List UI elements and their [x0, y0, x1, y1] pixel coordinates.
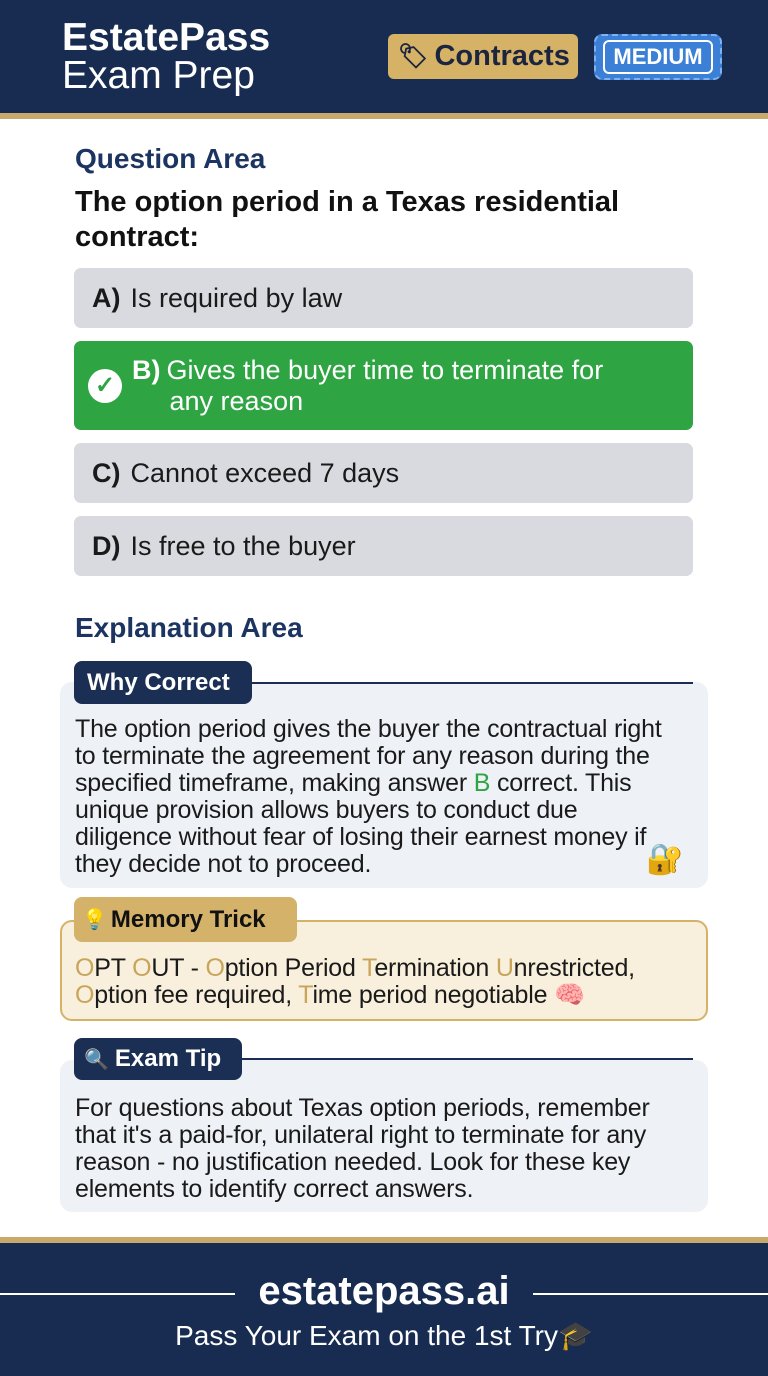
option B correct: any reason	[170, 386, 303, 416]
tab: memory trick: 💡	[82, 909, 107, 931]
exam tip text: reason - no justification needed. Look for these key	[75, 1148, 630, 1176]
footer	[0, 1237, 768, 1376]
heading: question area: Question Area	[75, 143, 265, 174]
why correct text	[75, 715, 662, 878]
option B correct: B)Gives the buyer time to terminate for	[132, 354, 603, 384]
brand title	[62, 16, 270, 97]
option C	[74, 443, 693, 503]
brand title: Exam Prep	[62, 54, 255, 97]
tab: why correct: Why Correct	[87, 668, 230, 696]
panel: memory trick	[60, 920, 708, 1021]
option A: Is required by law	[130, 282, 342, 312]
header	[0, 0, 768, 119]
exam tip text: that it's a paid-for, unilateral right to terminate for any	[75, 1121, 646, 1149]
category badge: 🏷	[398, 43, 428, 70]
why correct text: The option period gives the buyer the contractual right	[75, 715, 662, 743]
tab: exam tip: 🔍	[84, 1048, 109, 1070]
memory trick text	[75, 954, 635, 1009]
option A: A)	[92, 282, 120, 312]
tab: exam tip: Exam Tip	[115, 1045, 221, 1072]
brand title: EstatePass	[62, 16, 270, 59]
tab: memory trick	[74, 897, 297, 942]
memory trick text: Option fee required, Time period negotiable 🧠	[75, 981, 585, 1009]
difficulty badge	[594, 34, 722, 80]
category badge	[388, 34, 578, 79]
icon: check	[88, 368, 122, 402]
option D	[74, 516, 693, 576]
exam tip text	[75, 1094, 650, 1203]
question text: contract:	[75, 221, 199, 253]
why correct text: they decide not to proceed.	[75, 850, 371, 878]
why correct text: specified timeframe, making answer B correct. This	[75, 769, 631, 797]
option D: Is free to the buyer	[130, 530, 356, 560]
footer brand: estatepass.ai	[258, 1269, 510, 1313]
option B correct	[74, 341, 693, 430]
question text	[75, 186, 619, 253]
category badge: Contracts	[434, 40, 570, 72]
memory trick text: OPT OUT - Option Period Termination Unrestricted,	[75, 954, 635, 982]
why correct text: to terminate the agreement for any reason during the	[75, 742, 650, 770]
option A	[74, 268, 693, 328]
panel: why correct	[60, 682, 708, 888]
icon: check: ✓	[95, 372, 115, 399]
question text: The option period in a Texas residential	[75, 186, 619, 218]
option C: Cannot exceed 7 days	[130, 458, 399, 488]
panel: exam tip	[60, 1060, 708, 1212]
option C: C)	[92, 458, 120, 488]
option D: D)	[92, 530, 120, 560]
icon: key lock: 🔐	[646, 843, 683, 876]
heading: explanation area: Explanation Area	[75, 612, 303, 643]
exam tip text: For questions about Texas option periods, remember	[75, 1094, 650, 1122]
exam tip text: elements to identify correct answers.	[75, 1175, 473, 1203]
why correct text: diligence without fear of losing their earnest money if	[75, 823, 646, 851]
why correct text: unique provision allows buyers to conduct due	[75, 796, 577, 824]
footer tagline: Pass Your Exam on the 1st Try🎓	[175, 1320, 593, 1351]
tab: memory trick: Memory Trick	[111, 906, 266, 932]
tab: why correct	[74, 661, 252, 704]
tab: exam tip	[74, 1038, 242, 1080]
difficulty badge: MEDIUM	[613, 44, 703, 69]
